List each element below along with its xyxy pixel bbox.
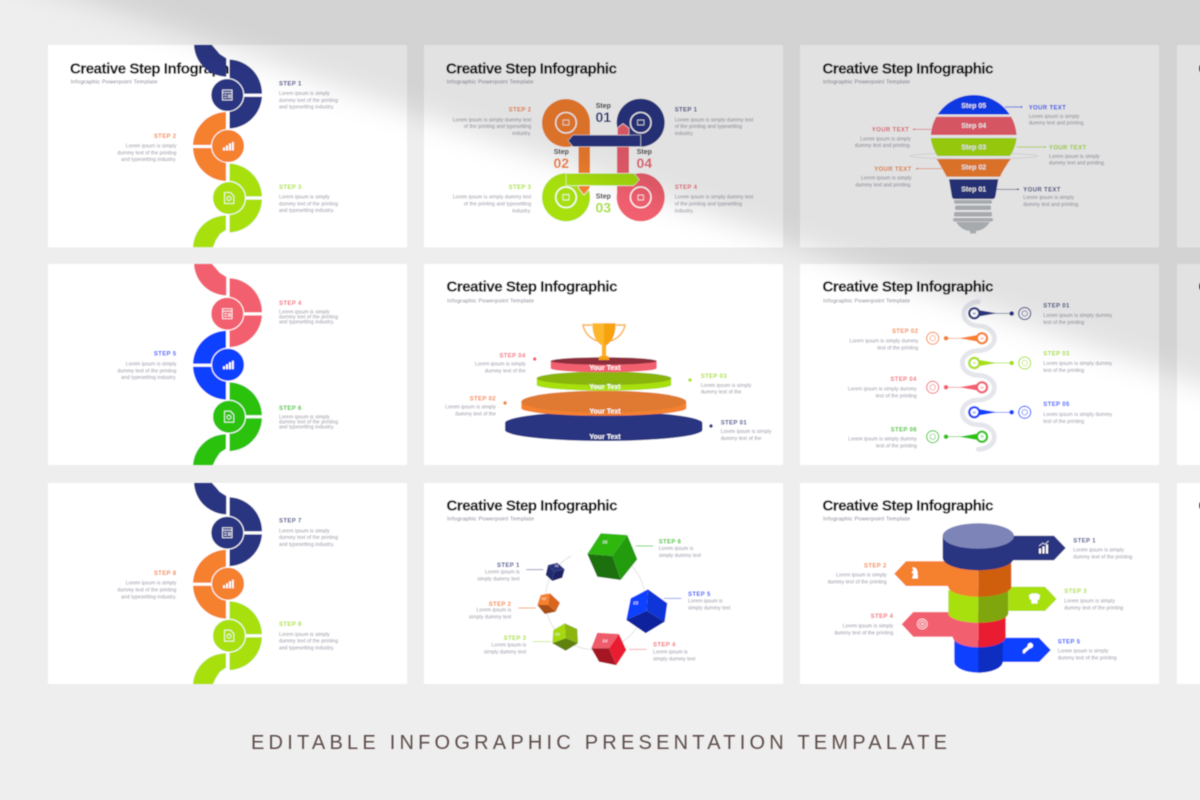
label: cube step 5: STEP 5 [688, 592, 711, 598]
panel: partial slide row 1 [1177, 45, 1200, 248]
panel: snake timeline [800, 264, 1159, 465]
label: cylinder step 3: STEP 3 [1064, 589, 1087, 595]
panel: wave steps 4-6 [48, 264, 407, 465]
disc: step 04: Your Text [589, 365, 621, 372]
disc: step 01 [505, 412, 702, 441]
text: snake step 02: Lorem ipsum is simply dummy [849, 339, 919, 345]
bulb label: step 03: dummy text and printing. [1049, 161, 1105, 167]
panel: wave steps 1-3 [48, 45, 407, 248]
bulb label: step 03: Lorem ipsum is simply [1049, 154, 1100, 160]
text: loop step 4: Lorem ipsum is simply dummy text [675, 195, 754, 201]
label: cylinder step 4: STEP 4 [871, 614, 894, 620]
cylinder: lime section with tab [948, 587, 1057, 623]
text: loop step 4: industry. [675, 208, 694, 214]
icon: trophy [583, 323, 625, 360]
text: step 4: STEP 4 [279, 301, 302, 307]
label: step 04 [475, 353, 536, 374]
text: loop step 4: STEP 4 [675, 185, 698, 191]
bulb label: step 01: YOUR TEXT [1023, 188, 1061, 194]
label: cylinder step 4 [834, 614, 894, 636]
bulb segment: step 01 [949, 179, 998, 199]
text: step 7 [279, 518, 338, 548]
text: step 3: and typesetting industry. [279, 208, 334, 214]
label: cylinder step 2: Lorem ipsum is simply [836, 573, 887, 579]
cube: step 01: 01 [555, 564, 559, 568]
bulb segment: step 04 [931, 117, 1017, 135]
text: step 1: and typesetting industry. [279, 105, 334, 111]
subtitle: panel 6: Infographic Powerpoint Template [823, 298, 910, 304]
text: step 4: dummy text of the printing [279, 314, 338, 320]
loop: red [617, 130, 665, 221]
text: step 5: STEP 5 [154, 352, 177, 358]
text: loop step 2: STEP 2 [509, 108, 532, 114]
subtitle: panel 3: Infographic Powerpoint Template [823, 80, 910, 86]
text: step 8: Lorem ipsum is simply [126, 581, 177, 587]
text: step 5: Lorem ipsum is simply [126, 361, 177, 367]
text: step 4 [279, 301, 338, 325]
label: cube step 6 [636, 540, 702, 559]
label: step 02: STEP 02 [470, 397, 496, 403]
heading: panel 8 title: Creative Step Infographic [446, 498, 618, 515]
step number 04: 04 [637, 155, 652, 171]
text: step 3 [279, 185, 338, 214]
text: snake step 03: test of the printing [1043, 368, 1084, 374]
heading: panel 2 title: Creative Step Infographic [446, 60, 617, 77]
label: step 03: STEP 03 [701, 374, 727, 380]
step number 01: Step [596, 103, 611, 110]
text: loop step 2 [453, 108, 532, 137]
step number 04: Step [637, 149, 652, 156]
bulb segment: step 03 [931, 138, 1017, 156]
snake path [962, 302, 994, 449]
node: step 04 [927, 381, 988, 393]
bulb label: step 02: dummy text and printing. [855, 183, 912, 189]
subtitle: panel 1: Infographic Powerpoint Template [70, 80, 158, 86]
text: loop step 3: STEP 3 [509, 185, 532, 191]
text: snake step 03: Lorem ipsum is simply dummy [1043, 361, 1113, 367]
cube: step 04: 04 [602, 638, 608, 644]
label: cube step 3: STEP 3 [504, 636, 527, 642]
panel: wave steps 7-9 [48, 483, 407, 684]
step number 01: 01 [596, 109, 611, 125]
label: cylinder step 2: dummy text of the printing [828, 580, 887, 586]
bulb label: step 04: YOUR TEXT [872, 128, 909, 134]
label: cylinder step 4: Lorem ipsum is simply [843, 624, 894, 630]
label: cube step 5: Lorem ipsum is [688, 599, 723, 605]
cycle ring [545, 556, 645, 650]
label: cylinder step 5: dummy text of the printing [1058, 656, 1117, 662]
label: cube step 4: simply dummy text [653, 656, 696, 662]
text: snake step 04: Lorem ipsum is simply dummy [848, 387, 917, 393]
cube: step 01 [546, 563, 565, 581]
label: cube step 4: STEP 4 [653, 642, 676, 648]
cylinder: red section with tab [902, 612, 1006, 647]
text: snake step 06: STEP 06 [891, 428, 917, 434]
text: step 9 [279, 622, 338, 652]
subtitle: panel 2: Infographic Powerpoint Template [446, 80, 534, 86]
label: cube step 3: Lorem ipsum is [492, 642, 527, 648]
label: step 01: STEP 01 [721, 420, 747, 426]
bulb segment: step 02 [937, 159, 1011, 177]
node: step 06 [927, 430, 988, 443]
text: step 1: Lorem ipsum is simply [279, 91, 330, 97]
footer caption: EDITABLE INFOGRAPHIC PRESENTATION TEMPALATE [251, 732, 947, 754]
text: step 6: STEP 6 [279, 406, 302, 412]
heading: panel 1 title: Creative Step Infographic [70, 60, 241, 77]
panel: podium with trophy [424, 264, 783, 465]
text: snake step 04: STEP 04 [890, 377, 917, 383]
label: cube step 6: simply dummy text [659, 553, 702, 559]
bulb segment: step 04: Step 04 [961, 123, 986, 130]
loop: lime with arrow [542, 173, 640, 221]
bulb label: step 04: dummy text and printing. [855, 143, 911, 149]
text: step 5: dummy text of the printing [117, 368, 177, 374]
bulb label: step 05: Lorem ipsum is simply [1029, 114, 1080, 120]
cube: step 06 [587, 533, 637, 580]
label: cylinder step 4: dummy text of the printing [834, 630, 893, 636]
label: cube step 4: Lorem ipsum is [653, 650, 688, 656]
label: cylinder step 5: STEP 5 [1058, 640, 1081, 646]
wave: blue segment [193, 331, 244, 400]
panel: stacked cylinder [800, 483, 1159, 684]
panel: cube cycle [424, 483, 783, 684]
text: snake step 05: Lorem ipsum is simply dummy [1043, 412, 1113, 418]
text: snake step 06 [848, 428, 917, 450]
label: cylinder step 1: Lorem ipsum is simply [1073, 548, 1124, 554]
label: step 03: dummy text of the [701, 390, 742, 396]
text: snake step 05: test of the printing [1043, 419, 1084, 425]
node: step 05 [968, 406, 1031, 418]
disc: step 02: Your Text [589, 408, 621, 416]
text: step 8: dummy text of the printing [117, 587, 177, 593]
text: snake step 06: Lorem ipsum is simply dummy [848, 437, 917, 443]
wave: orange segment [193, 550, 244, 619]
text: step 3: dummy text of the printing [279, 201, 338, 207]
label: cube step 2: Lorem ipsum is [477, 608, 512, 614]
bulb label: step 01: Lorem ipsum is simply [1023, 195, 1074, 201]
wave: navy segment [194, 45, 262, 128]
cube: step 02 [537, 593, 560, 614]
label: cylinder step 3: dummy text of the printing [1064, 605, 1124, 611]
text: step 2: STEP 2 [154, 134, 177, 140]
label: cube step 4 [629, 642, 696, 662]
loop: navy with arrow [568, 99, 665, 147]
bulb segment: step 01: Step 01 [961, 186, 986, 194]
subtitle: panel 8: Infographic Powerpoint Template [447, 517, 534, 523]
node: step 04: 04 [981, 385, 984, 389]
text: step 2: and typesetting industry. [121, 157, 176, 163]
bulb segment: step 05 [938, 95, 1010, 114]
text: step 7: STEP 7 [279, 518, 302, 524]
bulb label: step 02: Lorem ipsum is simply [861, 176, 912, 182]
bulb label: step 02: YOUR TEXT [874, 167, 912, 173]
label: cube step 5: simply dummy text [688, 606, 731, 612]
text: snake step 06: test of the printing [876, 444, 917, 450]
text: step 7: dummy text of the printing [279, 535, 338, 541]
text: step 2: Lorem ipsum is simply [126, 144, 177, 150]
node: step 06: 06 [981, 435, 984, 439]
text: step 9: Lorem ipsum is simply [279, 632, 330, 638]
label: cylinder step 2 [828, 564, 887, 586]
label: cube step 1: Lorem ipsum is [485, 570, 520, 576]
text: snake step 04: test of the printing [876, 394, 917, 400]
text: loop step 2: of the printing and typesetting [464, 124, 531, 130]
label: cube step 2: simply dummy text [469, 614, 512, 620]
node: step 02 [927, 332, 988, 344]
text: loop step 3: industry. [512, 208, 531, 214]
cube: step 02: 02 [542, 596, 547, 601]
wave: lime segment [193, 601, 262, 684]
label: step 01: dummy text of the [721, 436, 762, 442]
node: step 01: 01 [973, 311, 976, 315]
bulb base [953, 200, 993, 234]
label: step 02: Lorem ipsum is simply [445, 405, 496, 411]
label: step 03 [688, 374, 752, 396]
label: step 04: dummy text of the [485, 368, 526, 374]
label: cylinder step 1: dummy text of the printing [1073, 554, 1133, 560]
node: step 03: 03 [973, 361, 976, 365]
text: step 7: Lorem ipsum is simply [279, 528, 330, 534]
step number 03: 03 [596, 200, 611, 216]
arrow tip: red [617, 124, 629, 135]
bulb label: step 05 [1005, 106, 1085, 127]
cube: step 03: 03 [555, 632, 560, 636]
text: step 2 [117, 134, 177, 163]
text: loop step 1: industry. [675, 131, 694, 137]
cube: step 04 [591, 633, 626, 665]
text: loop step 3: of the printing and typesetting [464, 201, 531, 207]
bulb label: step 01 [997, 188, 1080, 208]
text: step 3: Lorem ipsum is simply [279, 194, 330, 200]
panel: partial slide row 2 [1177, 264, 1200, 465]
label: cube step 6: STEP 6 [659, 540, 682, 546]
node: step 05: 05 [973, 410, 976, 414]
text: step 1 [279, 82, 338, 111]
label: step 01: Lorem ipsum is simply [721, 429, 772, 435]
disc: step 03 [537, 372, 671, 391]
bulb label: step 03: YOUR TEXT [1049, 145, 1086, 151]
text: step 4: and typesetting industry. [279, 319, 334, 325]
panel: interlocking loops [424, 45, 783, 248]
cube: step 03 [552, 623, 578, 651]
label: cylinder step 5 [1058, 640, 1117, 662]
heading: panel 9 title: Creative Step Infographic [822, 498, 994, 515]
label: step 01 [709, 420, 772, 442]
disc: step 01: Your Text [589, 434, 621, 441]
text: snake step 01: STEP 01 [1043, 304, 1070, 310]
icon rings [556, 112, 651, 208]
label: step 03: Lorem ipsum is simply [701, 383, 752, 389]
label: cube step 3 [484, 636, 551, 655]
label: cylinder step 3: Lorem ipsum is simply [1064, 599, 1115, 605]
text: loop step 2: industry. [512, 131, 531, 137]
text: step 3: STEP 3 [279, 185, 302, 191]
node: step 03 [968, 357, 1031, 369]
text: step 8: STEP 8 [154, 571, 177, 577]
text: loop step 3 [453, 185, 532, 214]
label: cube step 1: STEP 1 [497, 563, 520, 569]
bulb label: step 05: YOUR TEXT [1029, 106, 1066, 112]
text: snake step 01 [1043, 304, 1113, 326]
text: step 6: Lorem ipsum is simply [279, 414, 330, 420]
arrow tip: orange [578, 186, 590, 195]
bulb label: step 04 [855, 128, 931, 149]
text: step 9: STEP 9 [279, 622, 302, 628]
text: snake step 04 [848, 377, 917, 400]
label: step 02: dummy text of the [455, 411, 496, 417]
text: loop step 1 [675, 108, 754, 137]
text: step 7: and typesetting industry. [279, 542, 334, 548]
cylinder: orange section with tab [894, 561, 1011, 597]
wave: navy segment [194, 483, 262, 566]
text: loop step 3: Lorem ipsum is simply dummy text [453, 195, 532, 201]
text: step 5: and typesetting industry. [121, 375, 176, 381]
text: snake step 02 [849, 329, 919, 352]
wave: green segment [193, 382, 262, 465]
text: step 8 [117, 571, 177, 600]
cylinder: navy top with tab [943, 523, 1066, 570]
label: cylinder step 2: STEP 2 [864, 564, 887, 570]
text: step 6 [279, 406, 338, 430]
panel: light bulb [800, 45, 1159, 248]
wave: orange segment [193, 112, 244, 181]
text: snake step 05: STEP 05 [1043, 402, 1070, 408]
step number 03: Step [596, 193, 611, 200]
heading: panel 6 title: Creative Step Infographic [822, 279, 994, 296]
wave: pink segment [194, 264, 262, 347]
label: cube step 3: simply dummy text [484, 649, 527, 655]
bulb segment: step 02: Step 02 [961, 165, 986, 172]
text: step 9: and typesetting industry. [279, 646, 334, 652]
bulb label: step 01: dummy text and printing. [1023, 202, 1080, 208]
label: cube step 2: STEP 2 [489, 602, 512, 608]
step number 02: 02 [554, 155, 569, 171]
label: cube step 1: simply dummy text [477, 577, 520, 583]
text: snake step 01: test of the printing [1043, 320, 1084, 326]
panel: partial slide row 3 [1177, 483, 1200, 684]
bulb label: step 05: dummy text and printing. [1029, 121, 1085, 127]
text: step 6: and typesetting industry. [279, 424, 334, 430]
label: cube step 6: Lorem ipsum is [659, 546, 694, 552]
label: cube step 5 [664, 592, 731, 612]
loop: orange [542, 99, 590, 188]
bulb label: step 02 [855, 167, 942, 189]
bulb segment: step 05: Step 05 [961, 103, 986, 110]
text: snake step 03 [1043, 352, 1113, 374]
node: step 01 [968, 307, 1031, 320]
text: loop step 1: of the printing and typesetting [675, 124, 742, 130]
text: step 4: Lorem ipsum is simply [279, 309, 330, 315]
text: snake step 02: STEP 02 [892, 329, 919, 335]
text: step 6: dummy text of the printing [279, 419, 338, 425]
text: step 9: dummy text of the printing [279, 639, 338, 645]
label: cylinder step 5: Lorem ipsum is simply [1058, 649, 1109, 655]
disc: step 04 [551, 357, 657, 372]
text: step 2: dummy text of the printing [117, 150, 177, 156]
step number 02: Step [554, 149, 569, 156]
label: cylinder step 1 [1073, 538, 1133, 560]
text: snake step 03: STEP 03 [1043, 352, 1070, 358]
label: step 02 [445, 397, 507, 417]
label: cylinder step 3 [1064, 589, 1124, 611]
cube: step 06: 06 [602, 540, 608, 544]
disc: step 03: Your Text [589, 384, 621, 391]
bulb segment: step 03: Step 03 [961, 144, 986, 152]
heading: panel 3 title: Creative Step Infographic [822, 60, 994, 77]
text: loop step 4: of the printing and typesetting [675, 201, 742, 207]
text: loop step 1: Lorem ipsum is simply dummy text [675, 117, 754, 123]
cylinder: blue section with tab [954, 638, 1051, 673]
text: step 8: and typesetting industry. [121, 594, 176, 600]
text: snake step 01: Lorem ipsum is simply dummy [1043, 313, 1113, 319]
heading: panel 5 title: Creative Step Infographic [446, 279, 618, 296]
text: step 1: dummy text of the printing [279, 98, 338, 104]
subtitle: panel 5: Infographic Powerpoint Template [447, 298, 534, 304]
wave: lime segment [193, 164, 262, 247]
bulb label: step 04: Lorem ipsum is simply [860, 136, 911, 142]
label: step 04: Lorem ipsum is simply [475, 361, 526, 367]
text: snake step 05 [1043, 402, 1113, 425]
bulb label: step 03 [1017, 145, 1105, 167]
node: step 02: 02 [981, 336, 984, 340]
text: loop step 2: Lorem ipsum is simply dummy text [453, 117, 532, 123]
label: cube step 1 [477, 563, 543, 583]
label: cube step 2 [469, 602, 536, 620]
label: step 04: STEP 04 [499, 353, 526, 359]
cube: step 05: 05 [633, 600, 639, 606]
text: loop step 4 [675, 185, 754, 214]
cube: step 05 [626, 589, 667, 633]
subtitle: panel 9: Infographic Powerpoint Template [823, 517, 910, 523]
text: snake step 02: test of the printing [877, 346, 918, 352]
label: cylinder step 1: STEP 1 [1073, 538, 1096, 544]
text: step 5 [117, 352, 177, 381]
text: step 1: STEP 1 [279, 82, 302, 88]
text: loop step 1: STEP 1 [675, 108, 698, 114]
disc: step 02 [521, 391, 686, 416]
